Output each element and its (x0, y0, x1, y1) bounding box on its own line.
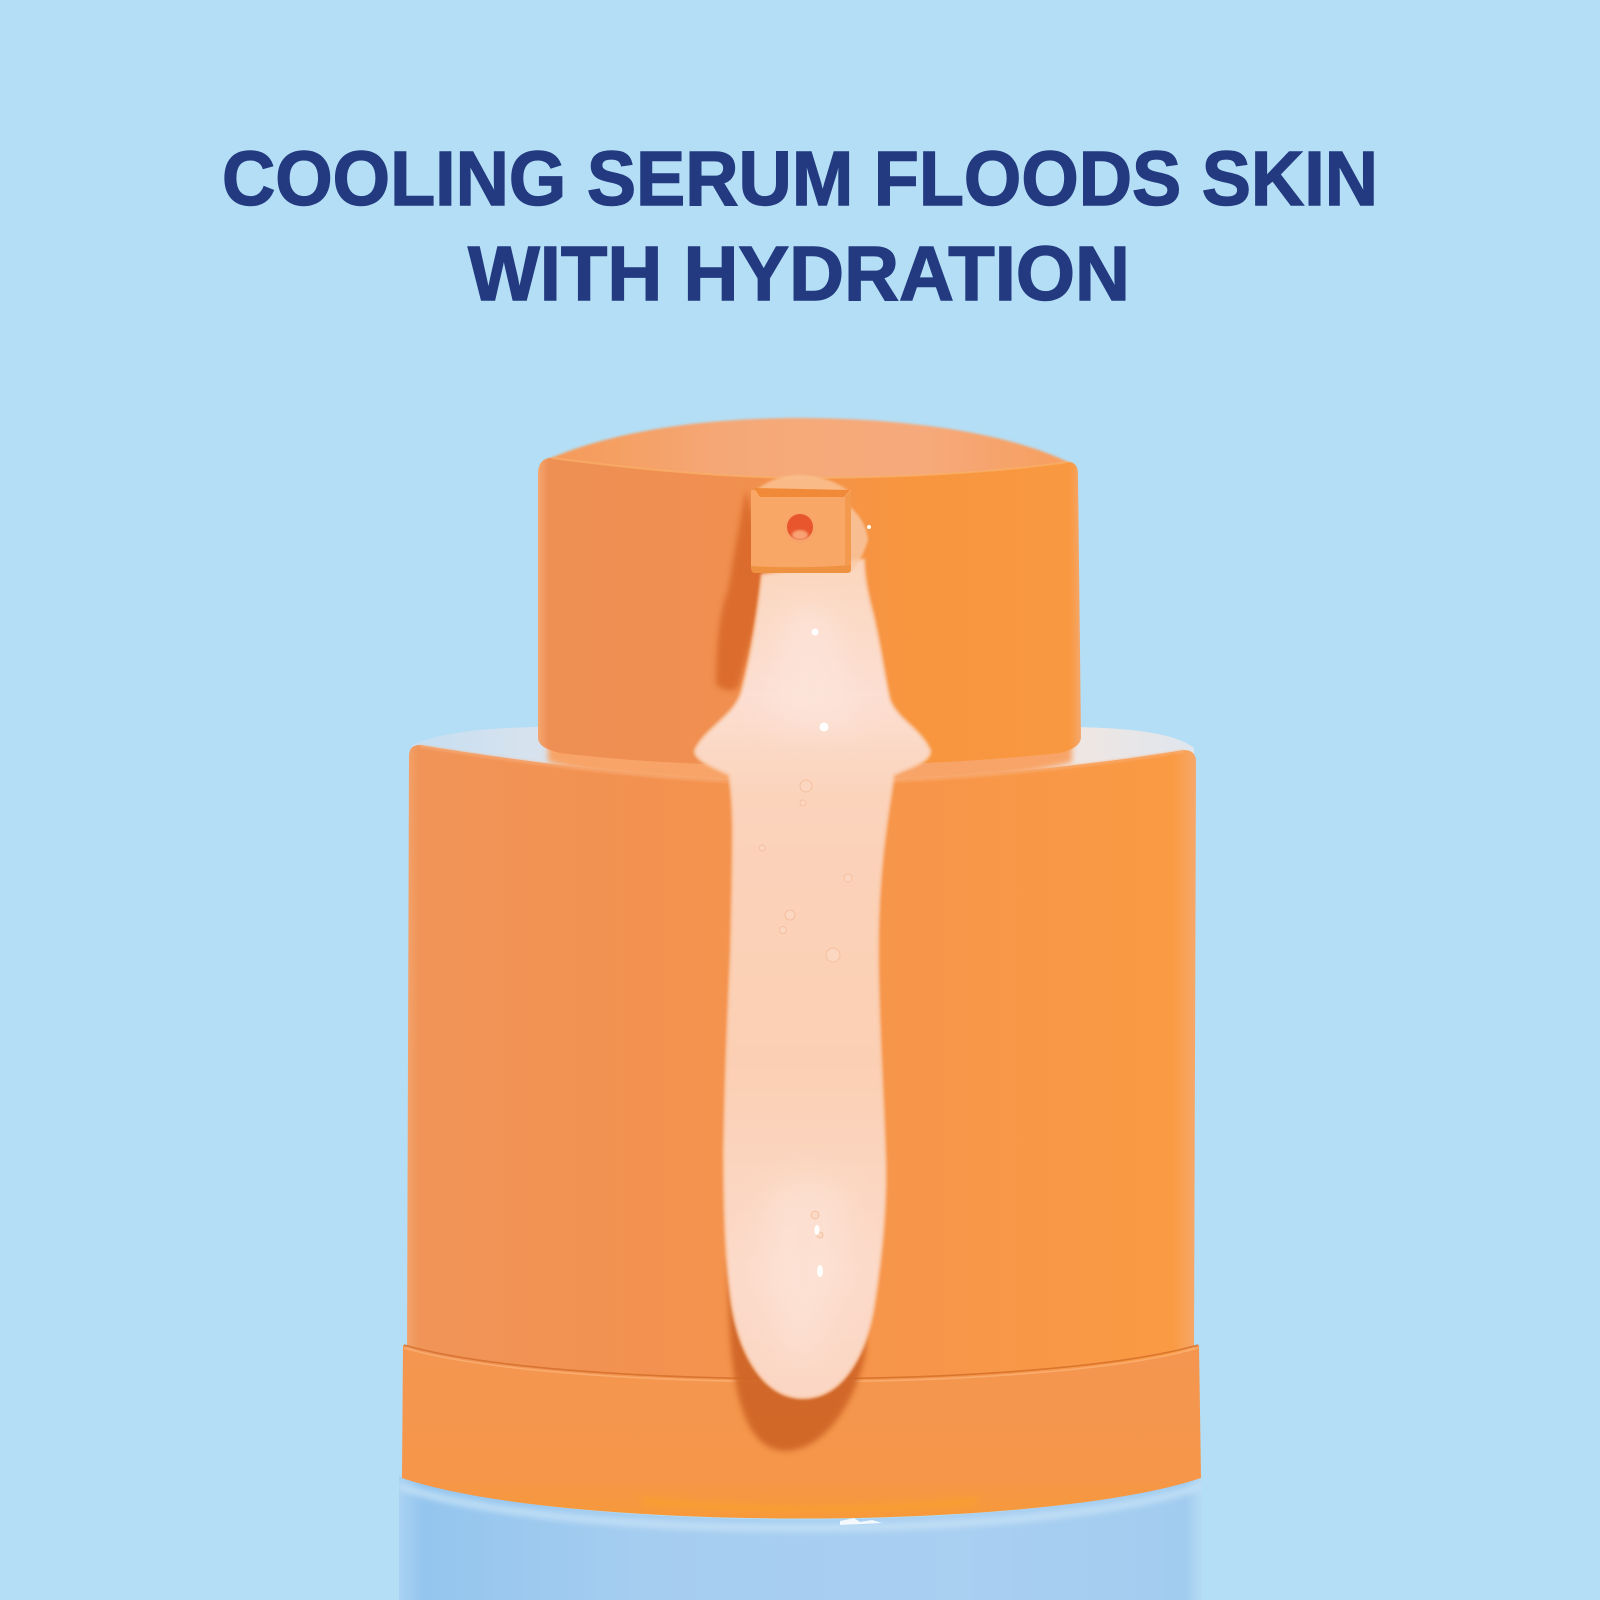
pump body (404, 745, 1198, 1382)
body edge highlight (420, 746, 1184, 783)
title (222, 136, 1378, 317)
title: COOLING SERUM FLOODS SKIN (222, 136, 1378, 222)
collar seam highlight (404, 1348, 1198, 1382)
cap reflection on body top (548, 742, 1072, 790)
specular highlights (812, 525, 871, 1277)
serum residue beside nozzle (848, 505, 868, 572)
cap front edge highlight (552, 458, 1068, 478)
pump cap (538, 418, 1081, 790)
bottle: blue base (399, 1476, 1202, 1600)
serum drip shadow (728, 1260, 866, 1451)
infographic canvas (224, 150, 1374, 1600)
body top surface (412, 727, 1194, 790)
nozzle block (751, 490, 851, 573)
nozzle hole (785, 513, 815, 543)
collar seam (404, 1345, 1198, 1379)
nozzle (751, 475, 851, 573)
nozzle bottom edge (751, 565, 851, 573)
lower sheen (761, 1176, 848, 1365)
nozzle top edge (754, 488, 850, 497)
title: WITH HYDRATION (468, 231, 1130, 317)
serum bead on nozzle (756, 475, 850, 492)
serum drip (695, 525, 930, 1398)
orange pump collar (402, 1345, 1201, 1518)
bubbles (759, 780, 852, 1238)
serum inner sheen (766, 605, 862, 731)
nozzle shadow on cap (716, 490, 768, 690)
cap front (538, 458, 1081, 766)
cap dome (546, 418, 1072, 480)
nozzle right face (845, 490, 851, 565)
